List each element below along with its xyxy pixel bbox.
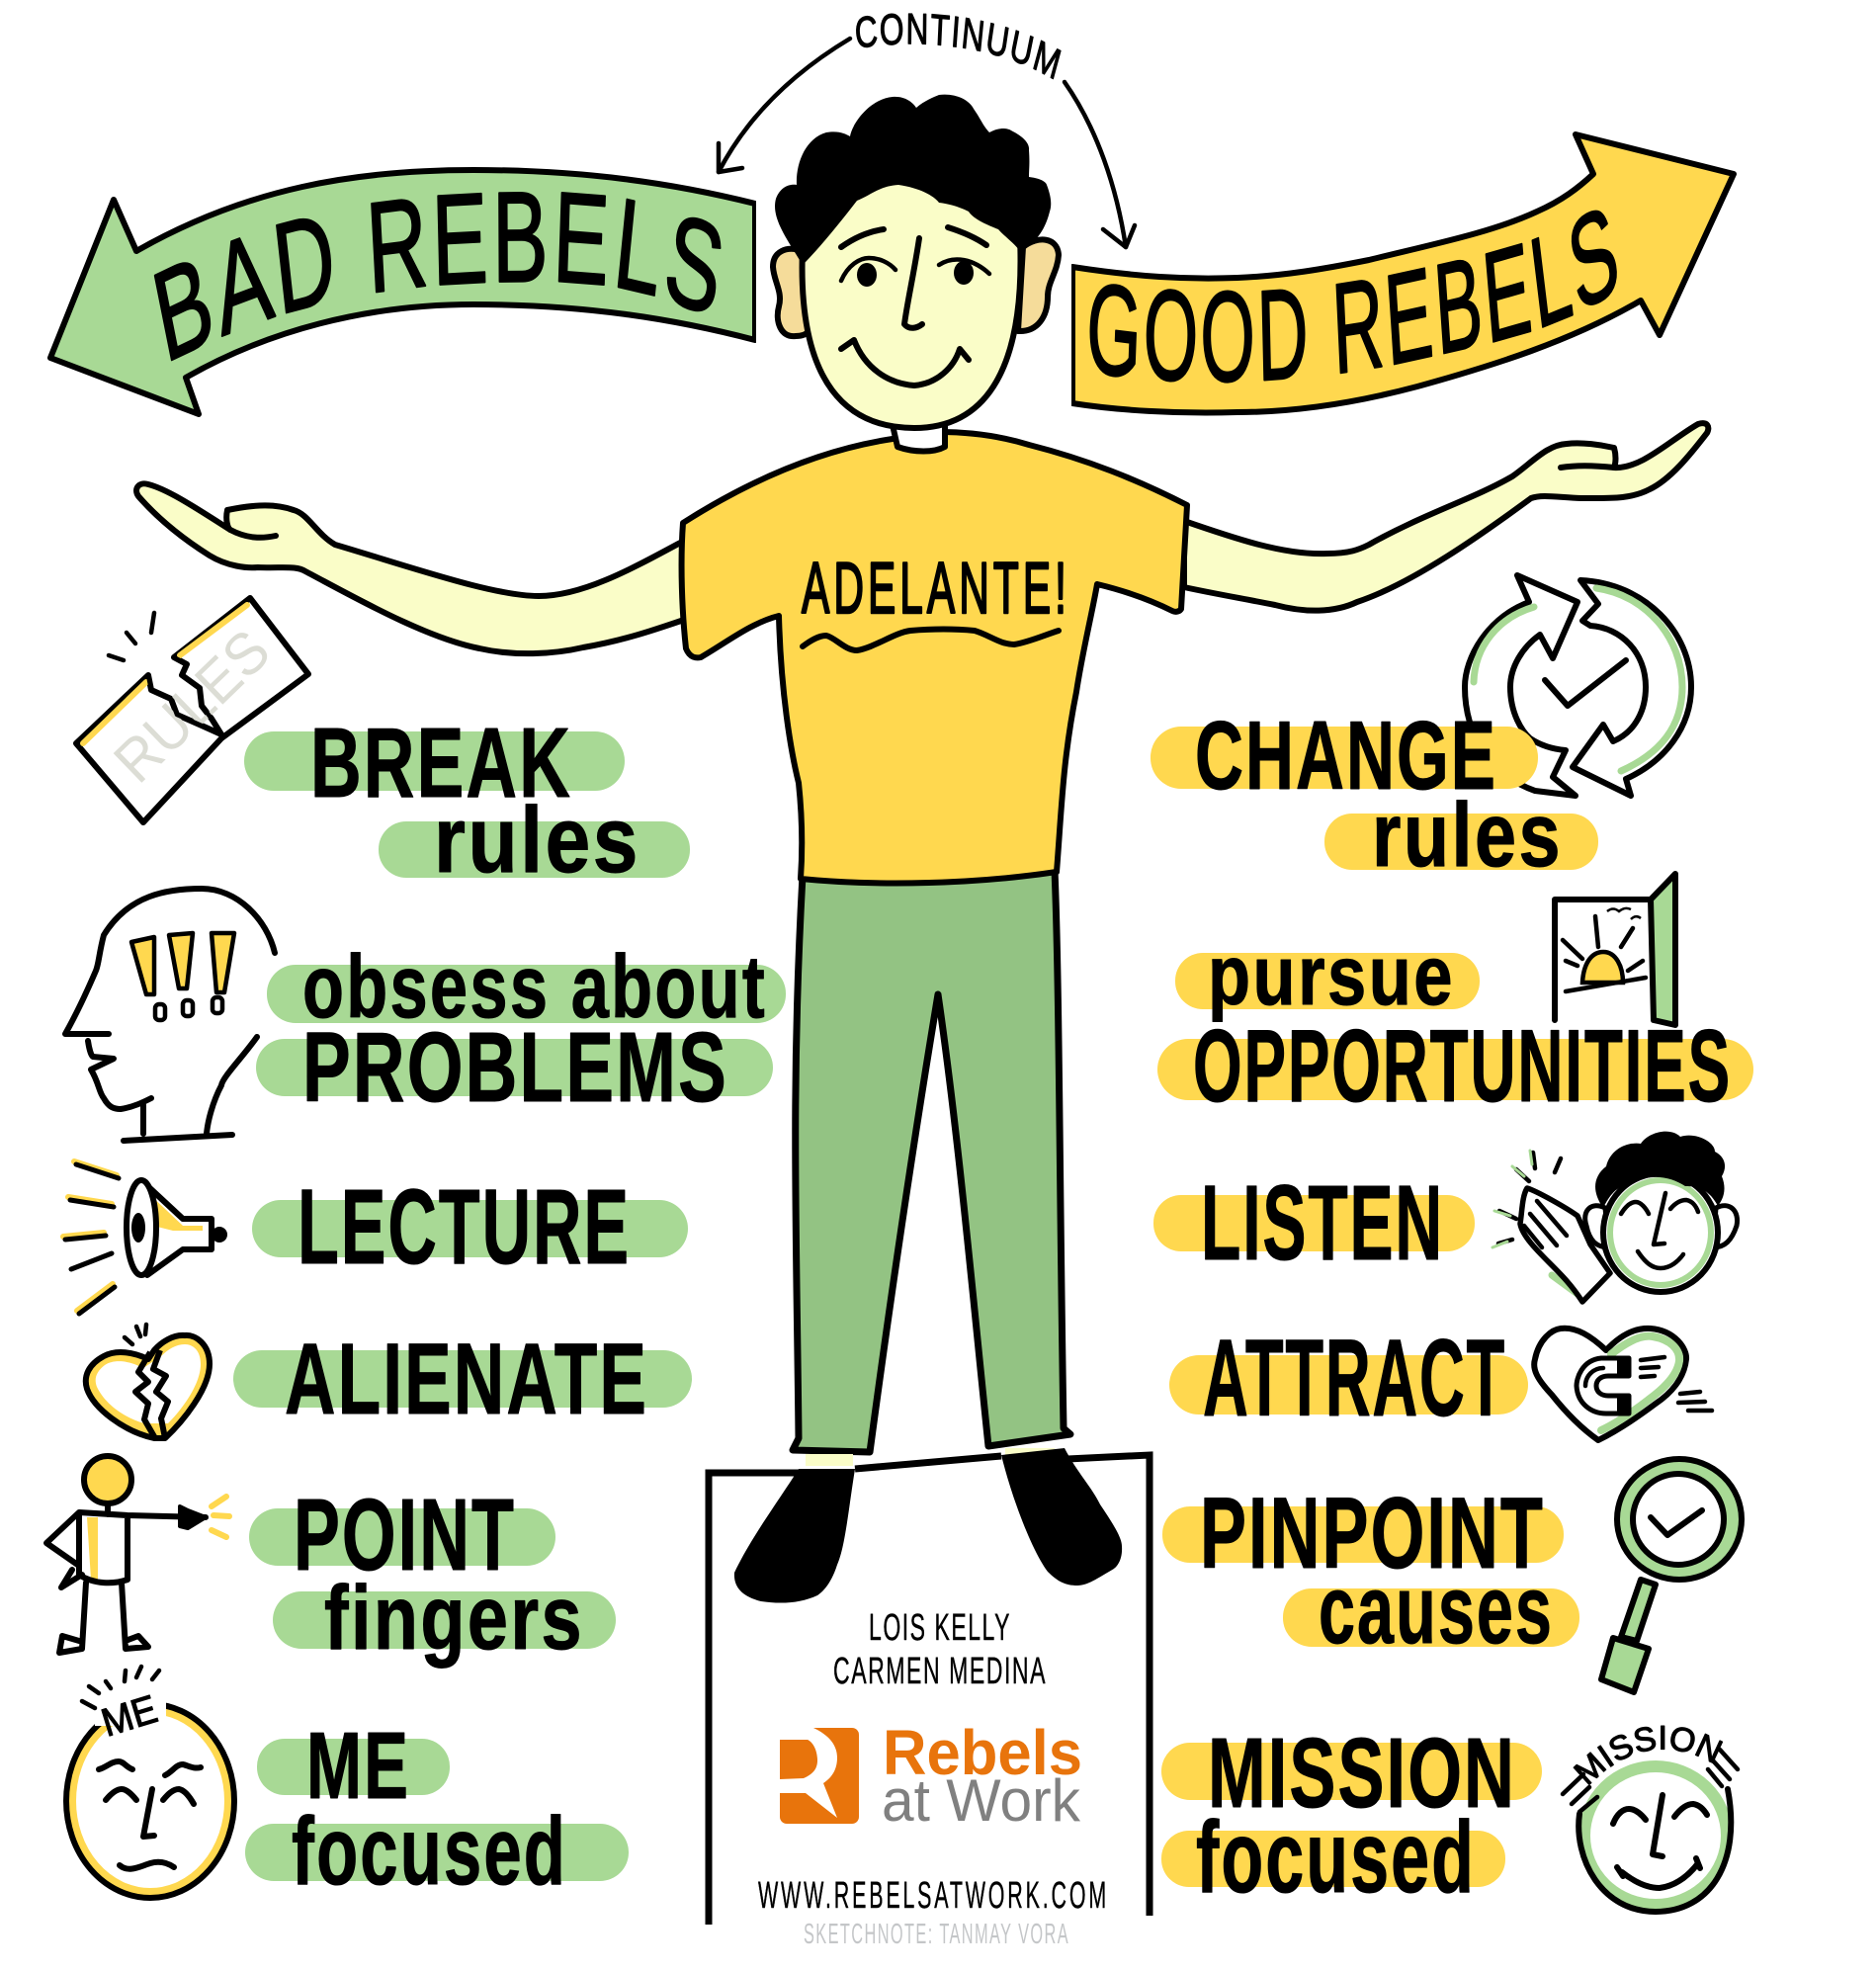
icon: torn rules (76, 598, 308, 822)
label: pursue OPPORTUNITIES: pursue (1208, 929, 1455, 1023)
arrow: continuum to bad rebels (719, 39, 850, 172)
label: ATTRACT: ATTRACT (1203, 1318, 1506, 1439)
label: LECTURE: LECTURE (298, 1166, 631, 1286)
label: POINT fingers (249, 1478, 616, 1669)
label: POINT fingers: POINT (294, 1478, 516, 1591)
label: BREAK rules: BREAK (310, 708, 572, 818)
icon: mission face: MISSION (1574, 1726, 1724, 1785)
label: obsess about PROBLEMS: obsess about (302, 938, 767, 1037)
shirt slogan: ADELANTE! (802, 549, 1070, 629)
label: CHANGE rules: rules (1372, 785, 1563, 886)
logo: rebels at work (776, 1717, 1082, 1834)
label: LISTEN (1153, 1162, 1475, 1282)
right arm (1184, 423, 1708, 611)
banner arrow: good rebels (1071, 131, 1737, 415)
label: MISSION focused: focused (1196, 1800, 1476, 1914)
label: ME focused (245, 1713, 629, 1905)
label: BREAK rules: rules (434, 788, 640, 893)
label: PINPOINT causes (1162, 1477, 1579, 1664)
label: CHANGE rules (1151, 701, 1598, 886)
icon: open door with sunrise (1555, 874, 1675, 1025)
website: WWW.REBELSATWORK.COM (758, 1875, 1109, 1917)
label: LECTURE (252, 1166, 688, 1286)
shirt (682, 432, 1187, 883)
credit: SKETCHNOTE: TANMAY VORA (804, 1919, 1069, 1950)
icon: broken heart (86, 1325, 210, 1438)
label: MISSION focused (1161, 1718, 1542, 1914)
shirt slogan (802, 549, 1070, 650)
label: LISTEN: LISTEN (1201, 1162, 1444, 1282)
banner arrow: bad rebels: BAD REBELS (154, 192, 722, 362)
icon: pointing figure (46, 1456, 229, 1653)
nose (904, 238, 922, 328)
continuum label: CONTINUUM (856, 13, 1062, 79)
eyes (841, 258, 989, 287)
authors (833, 1607, 1047, 1692)
icon: mission face (1560, 1726, 1740, 1915)
label: ME focused: ME (306, 1713, 410, 1819)
label: CHANGE rules: CHANGE (1195, 701, 1497, 810)
icon: magnet in heart (1534, 1329, 1712, 1440)
collar (893, 421, 945, 451)
label: POINT fingers: fingers (324, 1568, 584, 1669)
icon: torn rules: RULES (101, 617, 283, 795)
pedestal box (709, 1455, 1150, 1950)
icon: me face (66, 1667, 234, 1898)
socks (806, 1448, 1055, 1466)
arrow: continuum to good rebels (1065, 82, 1135, 247)
icon: magnifying glass (1601, 1459, 1742, 1692)
authors: LOIS KELLY (869, 1607, 1011, 1649)
icon: listening person (1492, 1132, 1738, 1302)
eyebrows (841, 227, 986, 247)
icon: megaphone (63, 1161, 227, 1314)
label: PINPOINT causes: PINPOINT (1200, 1477, 1545, 1589)
logo: rebels at work: at Work (882, 1767, 1081, 1834)
label: PINPOINT causes: causes (1319, 1555, 1554, 1664)
banner arrow: good rebels: GOOD REBELS (1089, 210, 1617, 384)
face (803, 148, 1021, 428)
figure: central character (136, 95, 1708, 1603)
authors: CARMEN MEDINA (833, 1651, 1047, 1692)
hair (775, 95, 1051, 265)
label: obsess about PROBLEMS: PROBLEMS (302, 1012, 728, 1123)
label: obsess about PROBLEMS (256, 938, 786, 1123)
icon: change cycle arrows (1465, 575, 1691, 796)
left ear (773, 249, 809, 336)
left arm (136, 483, 684, 653)
right ear (1018, 239, 1059, 331)
label: ALIENATE: ALIENATE (285, 1323, 648, 1435)
pants (793, 870, 1070, 1452)
icon: head with exclamation marks (65, 889, 275, 1141)
right shoe (1001, 1448, 1122, 1586)
logo: rebels at work: Rebels (883, 1717, 1082, 1788)
label: BREAK rules (244, 708, 690, 893)
label: ME focused: focused (292, 1797, 567, 1905)
label: MISSION focused: MISSION (1208, 1718, 1516, 1829)
label: ATTRACT (1169, 1318, 1528, 1439)
icon: me face: ME (97, 1687, 162, 1746)
left shoe (734, 1469, 855, 1603)
label: pursue OPPORTUNITIES (1157, 929, 1753, 1124)
smile (841, 340, 969, 386)
